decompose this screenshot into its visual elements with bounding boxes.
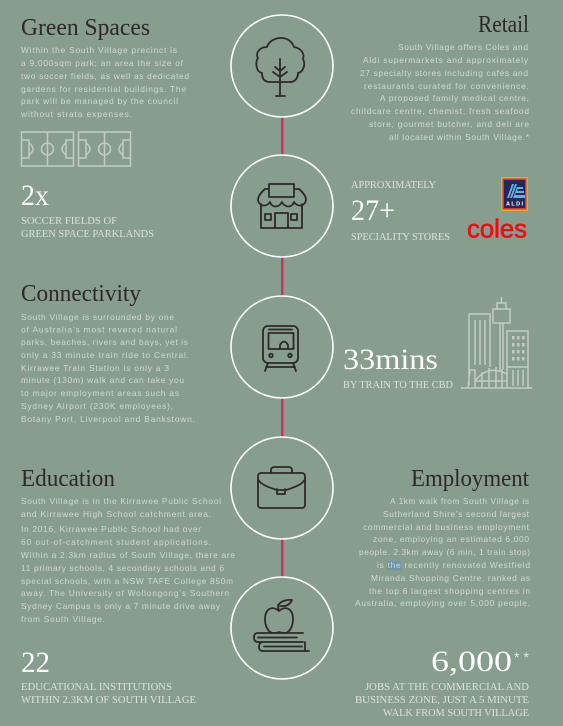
text block: retail description: South Village offers Coles and	[398, 42, 528, 52]
heading: retail: Retail	[478, 12, 529, 38]
caption: jobs at the commercial zone	[355, 682, 529, 719]
text block: employment description	[355, 496, 530, 608]
icon: briefcase	[231, 437, 333, 539]
text block: green spaces description: two soccer fields, as well as dedicated	[21, 71, 189, 81]
stat: 27+: 27+	[351, 194, 395, 227]
icon: shop	[231, 155, 333, 257]
text block: connectivity description: South Village is surrounded by one	[21, 312, 174, 322]
text block: green spaces description: gardens for residential buildings. The	[21, 84, 186, 94]
heading: employment: Employment	[411, 466, 529, 492]
text block: retail description: Aldi supermarkets and approximately	[363, 55, 529, 65]
heading: connectivity: Connectivity	[21, 281, 141, 307]
text block: employment description: zone, employing an estimated 6,000	[373, 534, 529, 544]
text block: connectivity description: Botany Port, Liverpool and Bankstown.	[21, 414, 195, 424]
text block: green spaces description: park will be managed by the council	[21, 96, 178, 106]
text block: green spaces description: a 9,000sqm park; an area the size of	[21, 58, 184, 68]
stat: 2x: 2x	[21, 179, 49, 212]
text block: education description: Sydney Campus is only a 7 minute drive away	[21, 601, 221, 611]
text block: education description: In 2016, Kirrawee Public School had over	[21, 524, 201, 534]
panel: education	[21, 466, 235, 706]
text block: employment description: people. 2.3km away (6 min, 1 train stop)	[359, 547, 530, 557]
text block: education description	[21, 496, 235, 624]
text block: education description: Within a 2.3km radius of South Village, there are	[21, 550, 235, 560]
panel: retail	[351, 12, 530, 244]
icon: train	[231, 296, 333, 398]
stat: 22: 22	[21, 646, 50, 679]
text block: education description: South Village is in the Kirrawee Public School	[21, 496, 221, 506]
text block: retail description: A proposed family medical centre,	[380, 93, 529, 103]
caption: jobs at the commercial zone: JOBS AT THE COMMERCIAL AND	[365, 682, 529, 693]
text block: green spaces description: without strata expenses.	[20, 109, 132, 119]
icon: apple on books	[231, 577, 333, 679]
text block: employment description: Miranda Shopping Centre, ranked as	[371, 573, 530, 583]
text block: education description: away. The University of Wollongong’s Southern	[21, 588, 229, 598]
text block: education description: 60 out-of-catchment student applications.	[21, 537, 211, 547]
caption: educational institutions: WITHIN 2.3KM OF SOUTH VILLAGE	[21, 695, 196, 706]
central timeline connector	[281, 110, 283, 590]
icon: tree	[231, 15, 333, 117]
caption: by train to the cbd: BY TRAIN TO THE CBD	[343, 380, 453, 391]
text block: connectivity description: of Australia’s most revered natural	[21, 324, 177, 334]
text block: retail description: childcare centre, chemist, fresh seafood	[351, 106, 529, 116]
text block: green spaces description	[20, 45, 189, 119]
logo: aldi: ALDI	[506, 202, 523, 208]
caption: soccer fields: GREEN SPACE PARKLANDS	[21, 229, 154, 240]
text block: retail description: store, gourmet butcher, and deli are	[369, 119, 529, 129]
text block: connectivity description: parks, beaches, rivers and bays, yet is	[21, 337, 188, 347]
caption: jobs at the commercial zone: WALK FROM SOUTH VILLAGE	[383, 708, 529, 719]
panel: connectivity	[21, 281, 532, 424]
text block: retail description: restaurants curated for convenience.	[364, 81, 529, 91]
text block: education description: special schools, with a NSW TAFE College 850m	[21, 576, 233, 586]
text block: green spaces description: Within the South Village precinct is	[21, 45, 177, 55]
text block: employment description: Sutherland Shire’s second largest	[383, 509, 530, 519]
text selection highlight	[387, 561, 401, 570]
stat: 33mins: 33mins	[343, 343, 438, 376]
icon: two soccer fields	[22, 132, 130, 166]
text block: retail description	[351, 42, 530, 142]
text block: employment description: A 1km walk from South Village is	[390, 496, 529, 506]
caption: soccer fields: SOCCER FIELDS OF	[21, 216, 117, 227]
stat: 6,000**	[431, 645, 530, 678]
text block: connectivity description: Kirrawee Train Station is only a 3	[21, 363, 169, 373]
text block: retail description: 27 specialty stores including cafés and	[360, 68, 528, 78]
logo: aldi	[501, 177, 528, 211]
caption: speciality stores: SPECIALITY STORES	[351, 232, 450, 243]
text block: connectivity description	[21, 312, 195, 424]
logo: coles: coles	[467, 214, 527, 244]
text block: education description: and Kirrawee High School catchment area.	[21, 509, 211, 519]
stat: 6,000**: 6,000	[431, 645, 512, 678]
caption: approximately: APPROXIMATELY	[351, 180, 436, 191]
panel: green spaces	[20, 15, 189, 240]
text block: education description: from South Village.	[21, 614, 105, 624]
text block: employment description: the top 6 largest shopping centres in	[369, 586, 530, 596]
panel: employment	[355, 466, 530, 719]
caption: educational institutions: EDUCATIONAL INSTITUTIONS	[21, 682, 172, 693]
text block: connectivity description: to major employment areas such as	[21, 388, 179, 398]
text block: connectivity description: minute (130m) walk and can take you	[21, 375, 184, 385]
heading: education: Education	[21, 466, 115, 492]
text block: retail description: all located within South Village.*	[389, 132, 530, 142]
text block: connectivity description: Sydney Airport (230K employees),	[21, 401, 173, 411]
text block: employment description: commercial and business employment	[363, 522, 530, 532]
caption: educational institutions	[21, 682, 196, 706]
text block: employment description: is the recently renovated Westfield	[377, 560, 530, 570]
text block: education description: 11 primary schools, 4 secondary schools and 6	[21, 563, 224, 573]
text block: connectivity description: only a 33 minute train ride to Central.	[21, 350, 189, 360]
text block: employment description: Australia, employing over 5,000 people.	[355, 598, 530, 608]
icon: sydney skyline	[461, 297, 532, 388]
stat: 6,000**: **	[514, 649, 530, 665]
heading: green spaces: Green Spaces	[21, 15, 150, 41]
caption: soccer fields	[21, 216, 154, 240]
caption: jobs at the commercial zone: BUSINESS ZONE, JUST A 5 MINUTE	[355, 695, 529, 706]
